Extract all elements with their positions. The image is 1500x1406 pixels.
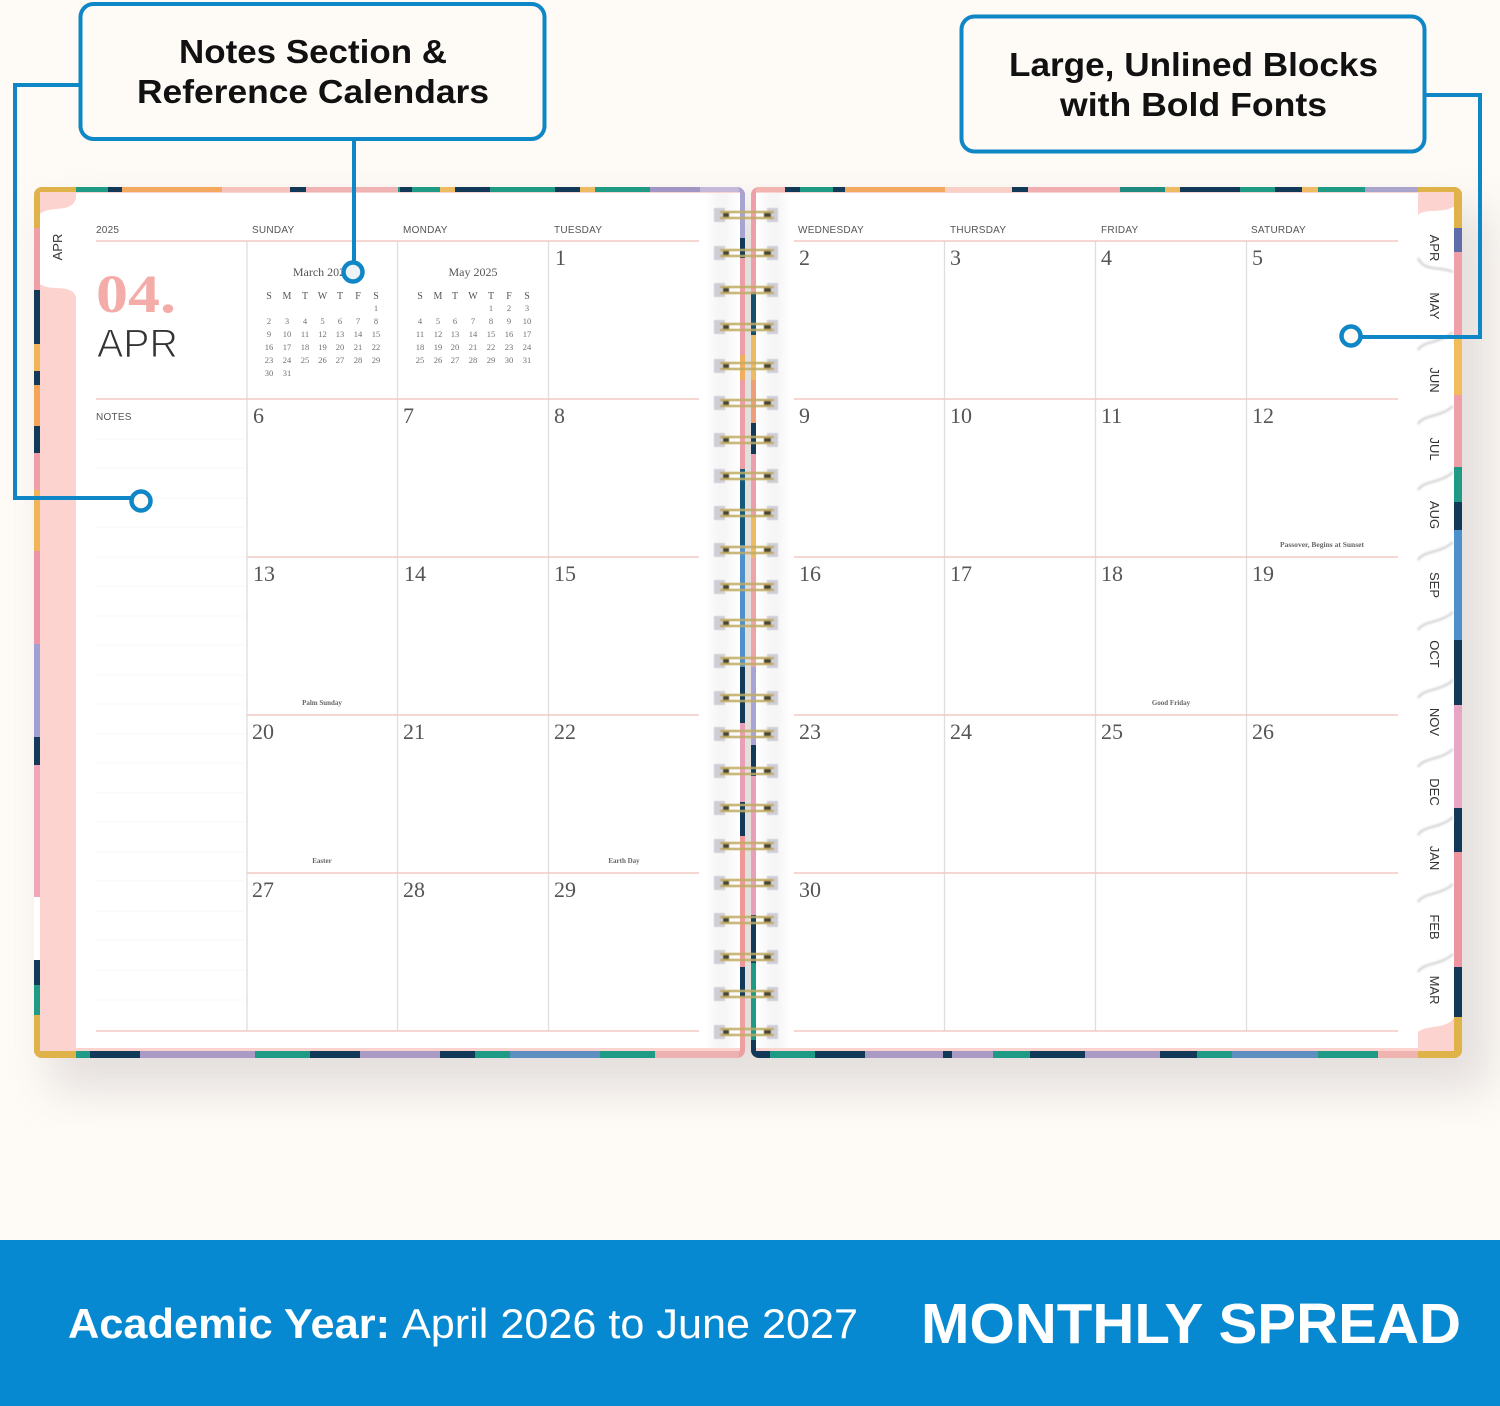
mini calendar: March 2025: 18 bbox=[301, 342, 309, 352]
mini calendar: May 2025: 21 bbox=[469, 342, 477, 352]
holiday labels: Palm Sunday bbox=[302, 699, 342, 707]
day numbers: 18 bbox=[1101, 561, 1123, 586]
day numbers: 14 bbox=[404, 561, 426, 586]
callout: notes section: Reference Calendars bbox=[137, 73, 489, 110]
academic year text bbox=[68, 1300, 858, 1347]
day numbers: 3 bbox=[950, 245, 961, 270]
day numbers bbox=[252, 245, 1274, 902]
day numbers: 28 bbox=[403, 877, 425, 902]
mini calendar: March 2025: M bbox=[283, 291, 292, 302]
mini calendar: May 2025: 1 bbox=[489, 303, 493, 313]
mini calendar: March 2025: 30 bbox=[265, 368, 273, 378]
mini calendar: May 2025: W bbox=[468, 291, 478, 302]
callout: large blocks: with Bold Fonts bbox=[1059, 86, 1327, 123]
mini calendar: March 2025: 19 bbox=[318, 342, 327, 352]
mini calendar: May 2025: 11 bbox=[416, 329, 424, 339]
weekday headers: WEDNESDAY bbox=[798, 225, 864, 236]
month tabs: DEC bbox=[1427, 778, 1442, 806]
day numbers: 20 bbox=[252, 719, 274, 744]
mini calendar: May 2025: 14 bbox=[469, 329, 478, 339]
mini calendar: March 2025: 28 bbox=[354, 355, 362, 365]
mini calendar: May 2025: 2 bbox=[507, 303, 511, 313]
day numbers: 15 bbox=[554, 561, 576, 586]
mini calendar: March 2025: 20 bbox=[336, 342, 344, 352]
mini calendar: March 2025: 17 bbox=[283, 342, 291, 352]
white page bbox=[756, 193, 1418, 1048]
day numbers: 21 bbox=[403, 719, 425, 744]
mini calendar: May 2025: May 2025 bbox=[448, 265, 498, 279]
day numbers: 29 bbox=[554, 877, 576, 902]
mini calendar: March 2025: F bbox=[355, 291, 361, 302]
holiday labels: Good Friday bbox=[1152, 699, 1191, 707]
mini calendar: May 2025: 19 bbox=[434, 342, 442, 352]
day numbers: 30 bbox=[799, 877, 821, 902]
day numbers: 11 bbox=[1101, 403, 1122, 428]
day numbers: 24 bbox=[950, 719, 972, 744]
mini calendar: May 2025: 31 bbox=[523, 355, 531, 365]
mini calendar: May 2025: 5 bbox=[436, 316, 440, 326]
mini calendar: May 2025: 8 bbox=[489, 316, 493, 326]
book drop shadow bbox=[50, 210, 1490, 1090]
month tabs: JUN bbox=[1427, 367, 1442, 393]
day numbers: 16 bbox=[799, 561, 821, 586]
mini calendar: May 2025: 12 bbox=[434, 329, 442, 339]
tab: APR left bbox=[40, 198, 76, 297]
weekday headers: 2025 bbox=[96, 225, 119, 236]
mini calendar: May 2025: 3 bbox=[525, 303, 529, 313]
footer banner bbox=[0, 1240, 1500, 1406]
day numbers: 4 bbox=[1101, 245, 1112, 270]
holiday labels bbox=[302, 541, 1365, 865]
mini calendar: March 2025: T bbox=[302, 291, 308, 302]
day numbers: 23 bbox=[799, 719, 821, 744]
white page bbox=[76, 193, 740, 1048]
mini calendar: March 2025: 2 bbox=[267, 316, 271, 326]
mini calendar: March 2025: 13 bbox=[336, 329, 344, 339]
mini calendar: May 2025: 25 bbox=[416, 355, 424, 365]
mini calendar: May 2025: 30 bbox=[505, 355, 513, 365]
mini calendar: May 2025: 7 bbox=[471, 316, 475, 326]
notes label: NOTES bbox=[96, 412, 132, 423]
mini calendar: March 2025: T bbox=[337, 291, 343, 302]
weekday headers: SUNDAY bbox=[252, 225, 295, 236]
mini calendar: May 2025: 9 bbox=[507, 316, 511, 326]
day numbers: 12 bbox=[1252, 403, 1274, 428]
day numbers: 9 bbox=[799, 403, 810, 428]
mini calendar: March 2025: March 2025 bbox=[293, 265, 351, 279]
mini calendar: March 2025: 16 bbox=[265, 342, 273, 352]
mini calendar: March 2025: 24 bbox=[283, 355, 292, 365]
weekday headers: MONDAY bbox=[403, 225, 448, 236]
mini calendar: May 2025: 28 bbox=[469, 355, 477, 365]
grid: left page bbox=[96, 241, 699, 1031]
mini calendar: March 2025: 23 bbox=[265, 355, 273, 365]
arrow: unlined blocks connector bbox=[1342, 95, 1480, 346]
mini calendar: May 2025: 13 bbox=[451, 329, 459, 339]
academic year text: Academic Year: bbox=[68, 1300, 390, 1347]
mini calendar: May 2025: 10 bbox=[523, 316, 531, 326]
pink page edge bbox=[756, 192, 1454, 1051]
bottom pink corner bbox=[1418, 1018, 1454, 1051]
pink page edge bbox=[40, 192, 740, 1051]
mini calendar: May 2025: 6 bbox=[453, 316, 457, 326]
day numbers: 13 bbox=[253, 561, 275, 586]
mini calendar: March 2025: 31 bbox=[283, 368, 291, 378]
arrow: notes connector bbox=[15, 85, 150, 510]
mini calendar: March 2025: S bbox=[266, 291, 272, 302]
mini calendar: March 2025: 22 bbox=[372, 342, 380, 352]
mini calendar: May 2025: 23 bbox=[505, 342, 513, 352]
mini calendar: March 2025: 26 bbox=[318, 355, 327, 365]
mini calendar: May 2025: S bbox=[524, 291, 530, 302]
callout: notes section: Notes Section & bbox=[179, 33, 447, 70]
weekday headers bbox=[96, 225, 1306, 236]
weekday headers: TUESDAY bbox=[554, 225, 602, 236]
mini calendar: May 2025: 16 bbox=[505, 329, 513, 339]
mini calendar: March 2025: 1 bbox=[374, 303, 378, 313]
left cover edge pattern bbox=[34, 187, 745, 1058]
mini calendar: March 2025: 5 bbox=[320, 316, 325, 326]
mini calendar: March 2025: S bbox=[373, 291, 379, 302]
month tabs: NOV bbox=[1427, 708, 1442, 736]
right cover edge pattern bbox=[751, 187, 1462, 1058]
mini calendar: May 2025: T bbox=[488, 291, 494, 302]
month tabs: SEP bbox=[1427, 572, 1442, 598]
mini calendar: March 2025: 21 bbox=[354, 342, 362, 352]
mini calendar: March 2025: 12 bbox=[318, 329, 327, 339]
mini calendar: May 2025: 22 bbox=[487, 342, 495, 352]
day numbers: 1 bbox=[555, 245, 566, 270]
month heading: 04. APR: 04. bbox=[96, 264, 176, 324]
mini calendar: March 2025: 8 bbox=[374, 316, 378, 326]
weekday headers: THURSDAY bbox=[950, 225, 1006, 236]
spine strip left bbox=[739, 187, 745, 238]
mini calendar: May 2025: 15 bbox=[487, 329, 495, 339]
spine strip right bbox=[751, 188, 756, 194]
monthly spread title: MONTHLY SPREAD bbox=[921, 1292, 1461, 1356]
mini calendar: May 2025: F bbox=[506, 291, 512, 302]
mini calendar: March 2025: 14 bbox=[354, 329, 363, 339]
callout: notes section bbox=[80, 4, 544, 139]
month tabs: OCT bbox=[1427, 640, 1442, 668]
mini calendar: March 2025: 25 bbox=[301, 355, 309, 365]
grid: right page bbox=[794, 241, 1398, 1031]
mini calendar: March 2025: 29 bbox=[372, 355, 380, 365]
weekday headers: SATURDAY bbox=[1251, 225, 1306, 236]
mini calendar: March 2025: 6 bbox=[338, 316, 342, 326]
mini calendar: March 2025: 15 bbox=[372, 329, 380, 339]
tab: APR left: APR bbox=[50, 234, 65, 260]
mini calendar: May 2025: 24 bbox=[523, 342, 532, 352]
mini calendar: May 2025: T bbox=[452, 291, 458, 302]
callout: large blocks: Large, Unlined Blocks bbox=[1009, 46, 1378, 83]
day numbers: 5 bbox=[1252, 245, 1263, 270]
day numbers: 7 bbox=[403, 403, 414, 428]
day numbers: 8 bbox=[554, 403, 565, 428]
mini calendar: May 2025: M bbox=[434, 291, 443, 302]
holiday labels: Easter bbox=[312, 857, 332, 865]
day numbers: 19 bbox=[1252, 561, 1274, 586]
month tabs: FEB bbox=[1427, 914, 1442, 940]
mini calendar: March 2025 bbox=[265, 265, 380, 378]
day numbers: 27 bbox=[252, 877, 274, 902]
mini calendar: March 2025: 4 bbox=[303, 316, 308, 326]
day numbers: 22 bbox=[554, 719, 576, 744]
mini calendar: March 2025: 7 bbox=[356, 316, 360, 326]
day numbers: 25 bbox=[1101, 719, 1123, 744]
mini calendar: May 2025: 17 bbox=[523, 329, 531, 339]
day numbers: 2 bbox=[799, 245, 810, 270]
month heading: 04. APR bbox=[96, 264, 178, 366]
mini calendar: March 2025: 10 bbox=[283, 329, 291, 339]
month tabs: MAY bbox=[1427, 292, 1442, 320]
arrow: reference calendars connector bbox=[344, 139, 362, 282]
day numbers: 26 bbox=[1252, 719, 1274, 744]
month tabs: APR bbox=[1427, 235, 1442, 261]
day numbers: 6 bbox=[253, 403, 264, 428]
spiral binding bbox=[705, 193, 791, 1048]
day numbers: 17 bbox=[950, 561, 972, 586]
holiday labels: Earth Day bbox=[608, 857, 640, 865]
month tabs: JAN bbox=[1427, 846, 1442, 870]
callout: large blocks bbox=[962, 16, 1424, 152]
mini calendar: May 2025: 20 bbox=[451, 342, 459, 352]
mini calendar: March 2025: 27 bbox=[336, 355, 344, 365]
holiday labels: Passover, Begins at Sunset bbox=[1280, 541, 1365, 549]
mini calendar: May 2025: 26 bbox=[434, 355, 442, 365]
month heading: 04. APR: APR bbox=[97, 322, 178, 366]
month tabs bbox=[1418, 193, 1454, 1040]
mini calendar: May 2025: S bbox=[417, 291, 423, 302]
mini calendar: March 2025: W bbox=[318, 291, 328, 302]
month tabs: JUL bbox=[1427, 437, 1442, 461]
mini calendar: March 2025: 11 bbox=[301, 329, 309, 339]
right planner page bbox=[751, 187, 1462, 1058]
left planner page bbox=[34, 187, 745, 1058]
day numbers: 10 bbox=[950, 403, 972, 428]
mini calendar: May 2025: 4 bbox=[418, 316, 423, 326]
mini calendar: May 2025: 27 bbox=[451, 355, 459, 365]
weekday headers: FRIDAY bbox=[1101, 225, 1139, 236]
month tabs: MAR bbox=[1427, 976, 1442, 1004]
month tabs: AUG bbox=[1427, 501, 1442, 529]
academic year text: April 2026 to June 2027 bbox=[402, 1300, 858, 1347]
mini calendar: May 2025: 18 bbox=[416, 342, 424, 352]
mini calendar: May 2025 bbox=[416, 265, 532, 365]
mini calendar: March 2025: 3 bbox=[285, 316, 289, 326]
mini calendar: March 2025: 9 bbox=[267, 329, 271, 339]
mini calendar: May 2025: 29 bbox=[487, 355, 495, 365]
